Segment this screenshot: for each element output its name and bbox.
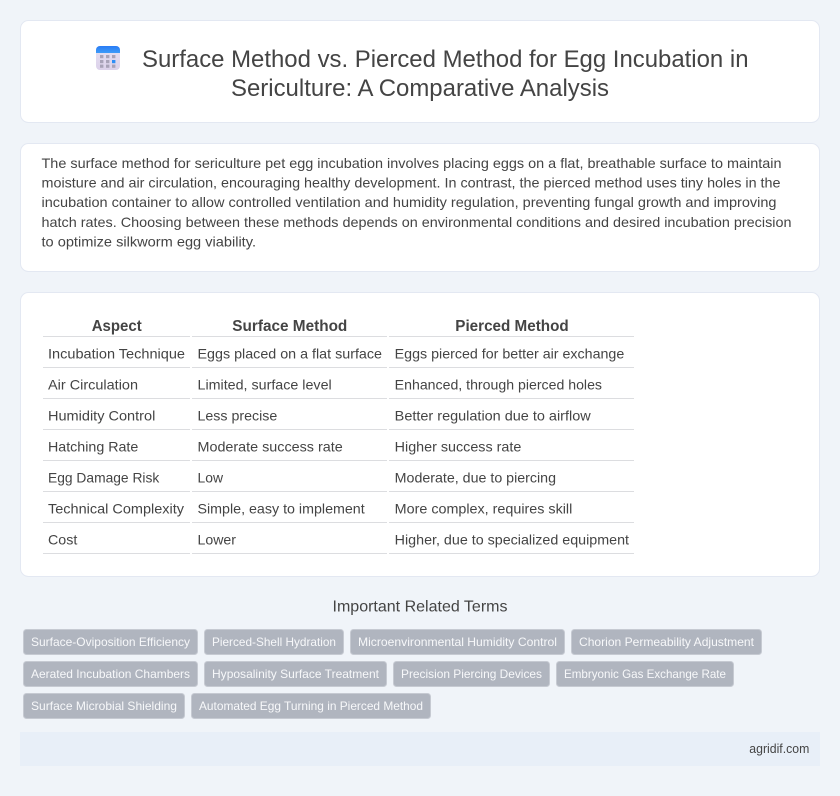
text block: description paragraph: incubation container to allow controlled ventilation and humidity regulation, preventing fungal growth and improving <box>42 194 776 210</box>
table header row: Surface Method <box>232 318 347 335</box>
table row: cost: Lower <box>198 531 236 547</box>
title: Sericulture: A Comparative Analysis <box>231 75 609 102</box>
title: Surface Method vs. Pierced Method for Egg Incubation in <box>142 46 748 73</box>
text block: description paragraph: The surface method for sericulture pet egg incubation involves placing eggs on a flat, breathable surface to maintain <box>42 155 782 171</box>
tag <box>394 662 550 686</box>
table row: hatching rate <box>43 438 634 461</box>
table row: technical complexity <box>43 500 634 523</box>
tag <box>350 630 564 654</box>
table row: egg damage risk: Low <box>198 469 224 485</box>
tag <box>24 694 184 718</box>
table row: humidity control: Better regulation due to airflow <box>395 407 592 423</box>
tag: Embryonic Gas Exchange Rate <box>564 667 726 681</box>
table header row: Pierced Method <box>455 318 569 335</box>
panel: description <box>20 144 820 272</box>
footer: agridif.com <box>749 741 809 756</box>
icon: calendar <box>96 46 120 70</box>
text block: description paragraph <box>42 155 792 249</box>
table row: hatching rate: Hatching Rate <box>48 438 139 454</box>
table row: egg damage risk: Moderate, due to piercing <box>395 469 556 485</box>
tag <box>24 630 198 654</box>
table row: incubation technique: Incubation Technique <box>48 345 185 361</box>
table row: technical complexity: Technical Complexity <box>48 500 184 516</box>
heading: important related terms: Important Related Terms <box>332 599 508 616</box>
tag: Chorion Permeability Adjustment <box>579 635 755 649</box>
tag: Automated Egg Turning in Pierced Method <box>199 699 423 713</box>
tag: Surface-Oviposition Efficiency <box>31 635 190 649</box>
table row: incubation technique: Eggs pierced for better air exchange <box>395 345 625 361</box>
panel: related term tags <box>24 630 762 718</box>
tag: Precision Piercing Devices <box>401 667 542 681</box>
table row: incubation technique <box>43 345 634 368</box>
table row: air circulation: Limited, surface level <box>198 376 332 392</box>
text block: description paragraph: hatch rates. Choosing between these methods depends on environmental conditions and desired incubation precision <box>42 214 792 230</box>
table row: hatching rate: Higher success rate <box>395 438 522 454</box>
table row: hatching rate: Moderate success rate <box>198 438 343 454</box>
table row: cost <box>43 531 634 554</box>
table row: air circulation <box>43 376 634 399</box>
tag: Microenvironmental Humidity Control <box>358 635 557 649</box>
table row: egg damage risk <box>43 469 634 492</box>
panel: header <box>20 20 820 122</box>
text block: description paragraph: to optimize silkworm egg viability. <box>42 233 256 249</box>
tag: Surface Microbial Shielding <box>31 699 177 713</box>
tag <box>572 630 762 654</box>
table row: air circulation: Enhanced, through pierced holes <box>395 376 602 392</box>
table row: cost: Cost <box>48 531 77 547</box>
tag <box>204 662 386 686</box>
tag: Pierced-Shell Hydration <box>212 635 336 649</box>
table row: humidity control: Less precise <box>198 407 278 423</box>
table header row <box>43 318 634 337</box>
tag <box>24 662 198 686</box>
table header row: Aspect <box>92 318 142 335</box>
table row: humidity control <box>43 407 634 430</box>
tag <box>192 694 430 718</box>
title <box>142 46 748 102</box>
table row: egg damage risk: Egg Damage Risk <box>48 469 160 485</box>
table row: technical complexity: Simple, easy to implement <box>198 500 365 516</box>
footer <box>20 732 820 766</box>
tag <box>556 662 734 686</box>
tag <box>204 630 344 654</box>
tag: Hyposalinity Surface Treatment <box>212 667 380 681</box>
table row: technical complexity: More complex, requires skill <box>395 500 572 516</box>
text block: description paragraph: moisture and air circulation, encouraging healthy development. In contrast, the pierced method uses tiny holes in the <box>42 175 781 191</box>
table row: air circulation: Air Circulation <box>48 376 138 392</box>
table row: humidity control: Humidity Control <box>48 407 155 423</box>
panel: comparison table <box>20 292 820 576</box>
table row: incubation technique: Eggs placed on a flat surface <box>198 345 382 361</box>
table row: cost: Higher, due to specialized equipment <box>395 531 629 547</box>
tag: Aerated Incubation Chambers <box>31 667 190 681</box>
